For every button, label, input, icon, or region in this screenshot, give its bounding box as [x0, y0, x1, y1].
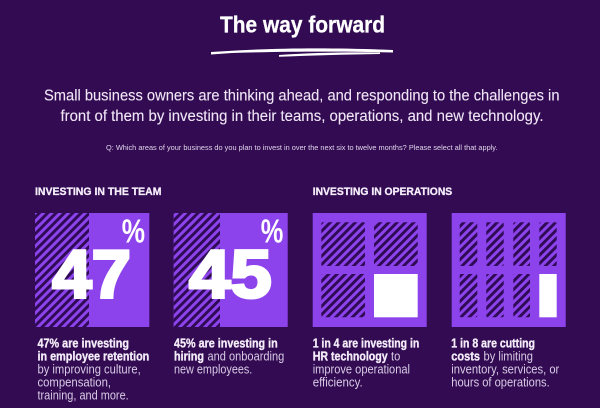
- caption: HR technology: 1 in 4 are investing in: [313, 336, 419, 350]
- caption: hiring: [174, 336, 284, 376]
- stat tile: 47 percent: 47: [52, 236, 131, 312]
- caption: HR technology: [313, 336, 419, 389]
- caption: HR technology: HR technology: [313, 349, 388, 363]
- stat tile: 47 percent: [35, 212, 149, 327]
- caption: cutting costs: hours of operations.: [451, 375, 550, 389]
- caption: HR technology: improve operational: [313, 362, 410, 376]
- grid tile: 1 in 4: [313, 213, 427, 327]
- caption: employee retention: compensation,: [38, 375, 111, 389]
- heading: investing in operations: INVESTING IN OPERATIONS: [313, 186, 452, 198]
- caption: hiring: new employees.: [174, 362, 252, 376]
- caption: cutting costs: 1 in 8 are cutting: [451, 336, 535, 350]
- caption: hiring: hiring: [174, 349, 204, 363]
- intro text: [44, 88, 560, 125]
- caption: cutting costs: inventory, services, or: [451, 362, 559, 376]
- intro text: Small business owners are thinking ahead, and responding to the challenges in: [44, 88, 560, 105]
- stat tile: 45 percent: [174, 212, 288, 327]
- caption: employee retention: [38, 336, 149, 402]
- caption: hiring: and onboarding: [208, 349, 284, 363]
- caption: cutting costs: costs: [451, 349, 480, 363]
- intro text: front of them by investing in their teams, operations, and new technology.: [60, 108, 544, 125]
- caption: hiring: 45% are investing in: [174, 336, 278, 350]
- caption: employee retention: in employee retention: [38, 349, 149, 363]
- caption: cutting costs: by limiting: [484, 349, 533, 363]
- caption: employee retention: 47% are investing: [38, 336, 129, 350]
- survey question: Q: Which areas of your business do you plan to invest in over the next six to twelve months? Please select all that apply.: [106, 143, 498, 152]
- heading: investing in the team: INVESTING IN THE TEAM: [35, 186, 162, 198]
- caption: employee retention: by improving culture,: [38, 362, 141, 376]
- caption: employee retention: training, and more.: [38, 388, 129, 402]
- title: The way forward: [220, 12, 385, 38]
- brush underline: [211, 48, 393, 57]
- grid tile: 1 in 8: [452, 213, 566, 327]
- caption: HR technology: efficiency.: [313, 375, 363, 389]
- caption: cutting costs: [451, 336, 559, 389]
- stat tile: 45 percent: %: [261, 212, 283, 249]
- stat tile: 45 percent: 45: [189, 236, 272, 312]
- stat tile: 47 percent: %: [122, 212, 145, 249]
- caption: HR technology: to: [391, 349, 400, 363]
